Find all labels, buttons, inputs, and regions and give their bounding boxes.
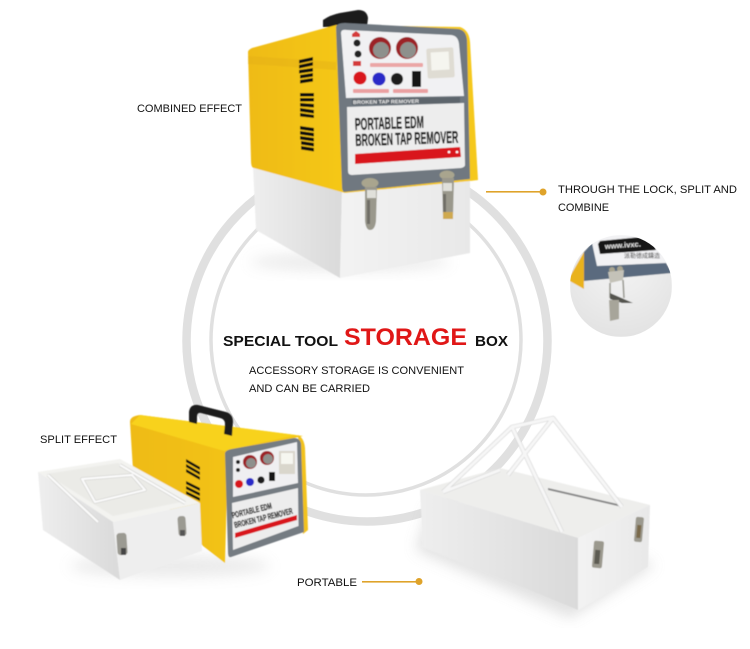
center heading: STORAGE (344, 324, 467, 351)
control panel knobs and switches (352, 31, 455, 93)
product: large storage box with handle (416, 418, 655, 618)
leader line: lock callout (486, 188, 546, 196)
latches (362, 170, 454, 230)
machine label text: BROKEN TAP REMOVER (355, 128, 459, 150)
description text: AND CAN BE CARRIED (249, 383, 370, 395)
small vents (186, 459, 200, 501)
center heading (223, 324, 508, 351)
machine label text (355, 112, 459, 150)
small machine label: PORTABLE EDM (231, 501, 273, 520)
handle (189, 405, 233, 436)
brand strip text: BROKEN TAP REMOVER (353, 99, 419, 106)
center heading: BOX (475, 333, 508, 350)
leader line: portable (362, 578, 422, 585)
circular detail: lock close-up: www.ivxc. (604, 240, 641, 251)
box handle (443, 418, 622, 532)
machine label text: PORTABLE EDM (355, 113, 424, 134)
callout text: through the lock: THROUGH THE LOCK, SPLIT AND (558, 184, 737, 196)
inner decorative ring (211, 185, 521, 495)
small machine label: BROKEN TAP REMOVER (233, 506, 294, 530)
box latches (592, 517, 644, 568)
small control panel (235, 451, 295, 488)
label: combined effect: COMBINED EFFECT (137, 103, 242, 115)
circular detail: lock close-up (568, 235, 672, 337)
split box latches (116, 516, 187, 555)
vents (299, 57, 314, 152)
label: portable: PORTABLE (297, 577, 357, 589)
product: split machine and box (38, 405, 308, 580)
small machine label (231, 496, 294, 530)
red label strip (355, 147, 461, 164)
outer decorative ring (186, 160, 548, 522)
split box (38, 459, 200, 522)
label: split effect: SPLIT EFFECT (40, 434, 117, 446)
description text (249, 365, 464, 395)
callout text: through the lock: COMBINE (558, 202, 609, 214)
description text: ACCESSORY STORAGE IS CONVENIENT (249, 365, 464, 377)
circular detail: lock close-up: 派勒德成鑄造 (624, 252, 660, 260)
callout text: through the lock (558, 184, 737, 214)
center heading: SPECIAL TOOL (223, 333, 338, 350)
product: combined machine and storage box (248, 10, 478, 278)
split box handle (48, 465, 185, 522)
